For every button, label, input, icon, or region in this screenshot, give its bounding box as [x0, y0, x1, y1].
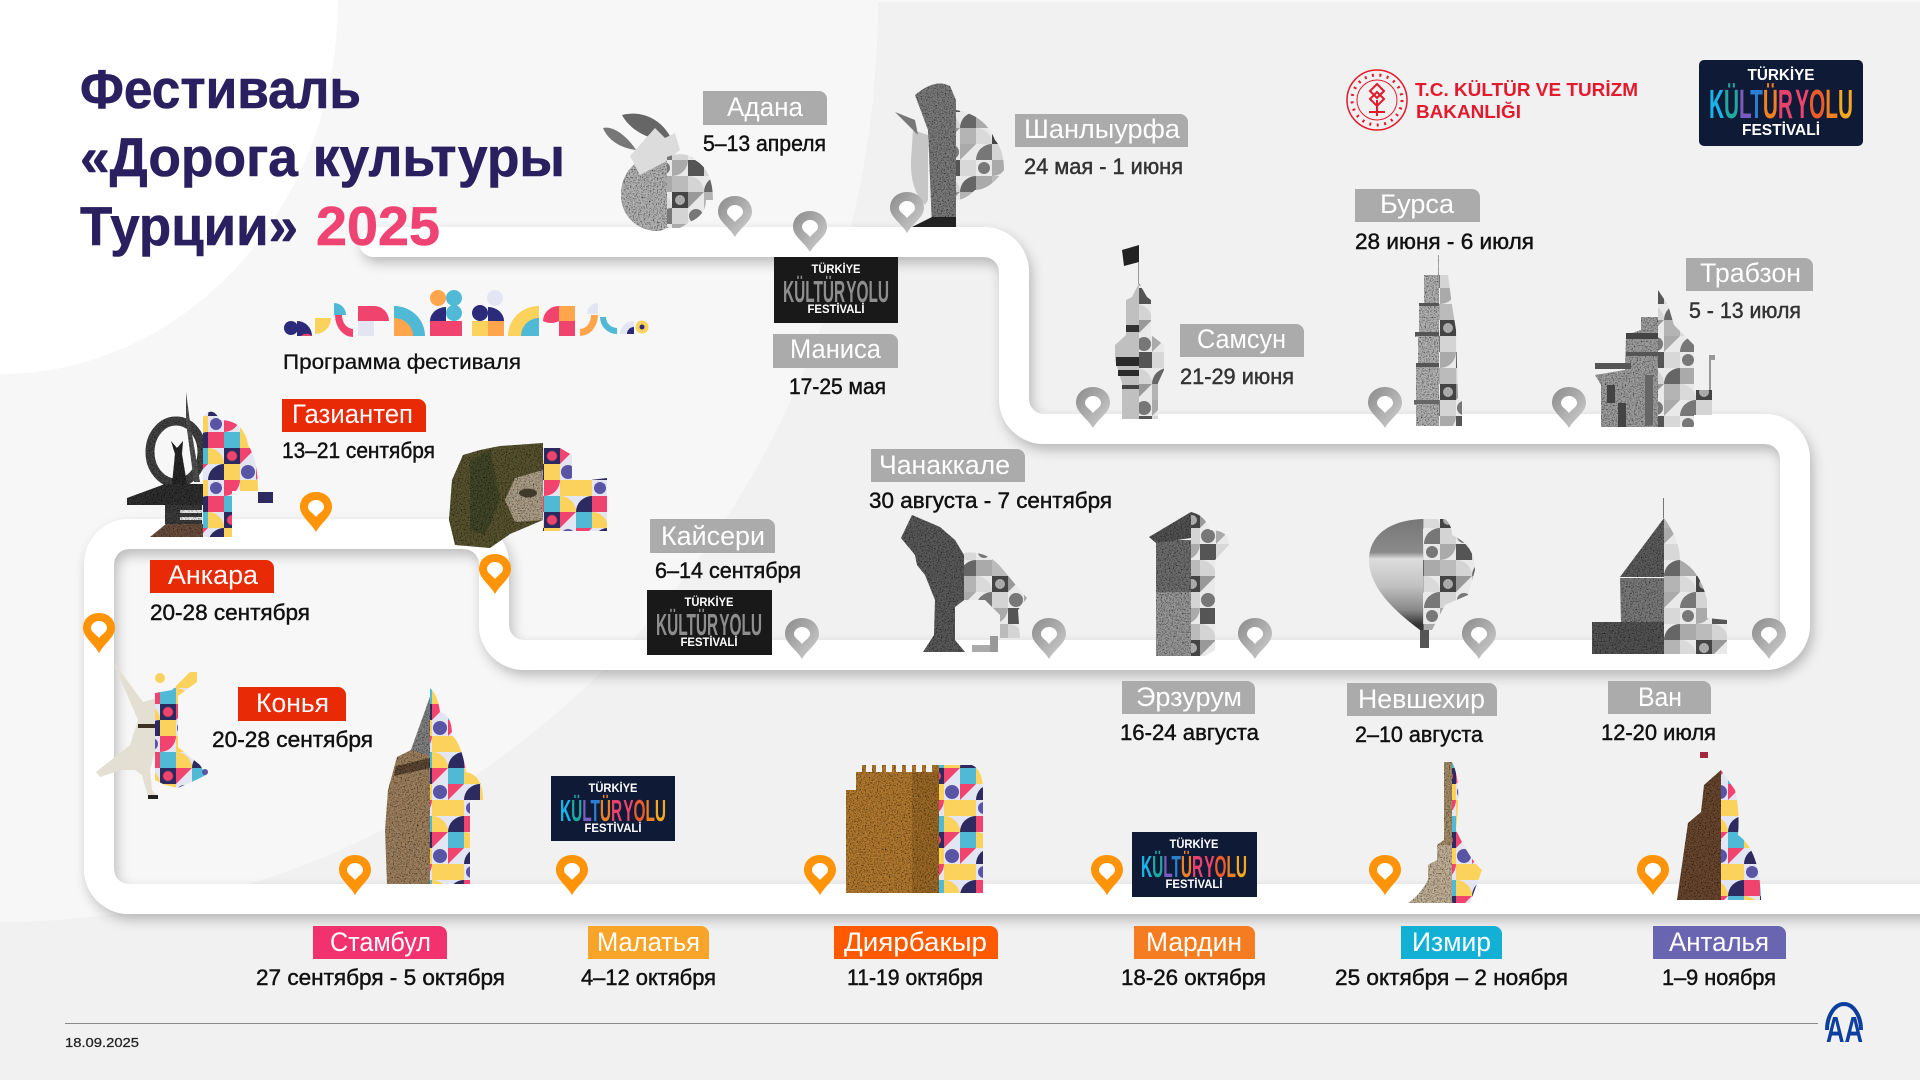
title: Фестиваль [80, 58, 361, 120]
stop: Nevsehir: 2–10 августа [1355, 722, 1484, 747]
stop: Van: 12-20 июля [1601, 720, 1716, 745]
stop: Trabzon: Трабзон [1700, 258, 1801, 288]
decorative programme strip [284, 290, 648, 337]
logo: colour Malatya: FESTİVALİ [584, 822, 642, 835]
stop: Antalya: Анталья [1669, 927, 1769, 957]
illustration: Trabzon mansion [1595, 273, 1715, 427]
stop: Nevsehir: Невшехир [1358, 684, 1485, 714]
logo: grey Manisa: FESTİVALİ [808, 303, 864, 316]
date: 18.09.2025 [65, 1035, 139, 1050]
pins: past grey [718, 192, 1786, 659]
stop: Sanliurfa: 24 мая - 1 июня [1024, 154, 1183, 179]
logo: Anadolu Agency: AA [1826, 1009, 1863, 1050]
illustration: Erzurum twin minaret [1149, 512, 1229, 656]
illustration: Konya whirling dervish [96, 662, 208, 799]
stop: Canakkale: 30 августа - 7 сентября [869, 488, 1112, 513]
stop: Ankara: Анкара [168, 560, 259, 590]
logo: grey Kayseri: KÜLTÜR YOLU [656, 607, 762, 642]
winding festival road [99, 242, 1920, 899]
stop: Gaziantep [282, 399, 435, 463]
logo: colour Malatya: KÜLTÜR YOLU [560, 793, 666, 828]
logo: colour Mardin [1132, 832, 1257, 897]
stop: Erzurum [1120, 681, 1260, 745]
stop: Diyarbakir [834, 926, 998, 990]
logo: Anadolu Agency [1826, 1004, 1863, 1050]
stop: Istanbul [256, 926, 505, 990]
stop: Mardin [1121, 926, 1266, 990]
stop: Adana: 5–13 апреля [703, 131, 826, 156]
stop: Manisa: 17-25 мая [789, 374, 886, 399]
illustration: Bursa clock tower [1414, 255, 1462, 426]
illustration: Antalya tower [1677, 752, 1761, 900]
stop: Van [1601, 681, 1716, 745]
illustration: Diyarbakir fortress [846, 765, 983, 893]
stop: Nevsehir [1347, 683, 1497, 747]
illustration: Gaziantep mosaic face [449, 443, 607, 548]
footer rule [65, 1023, 1818, 1024]
stop: Bursa: 28 июня - 6 июля [1355, 229, 1534, 254]
title: «Дорога культуры [80, 126, 565, 188]
stop: Canakkale: Чанаккале [879, 450, 1010, 480]
stop: Izmir: 25 октября – 2 ноября [1335, 965, 1568, 990]
logo: Türkiye Kültür Yolu main [1699, 60, 1863, 146]
illustration: Istanbul Galata tower [385, 688, 483, 884]
logo: colour Malatya [551, 776, 675, 841]
stop: Izmir: Измир [1412, 927, 1491, 957]
stop: Gaziantep: 13–21 сентября [282, 438, 435, 463]
stop: Sanliurfa [1015, 114, 1188, 179]
logo: colour Mardin: TÜRKİYE [1170, 838, 1219, 851]
stop: Manisa: Маниса [790, 334, 882, 364]
logo: grey Kayseri: TÜRKİYE [684, 596, 734, 609]
logo: Ministry of Culture and Tourism: BAKANLIĞI [1416, 101, 1521, 122]
logo: Ministry of Culture and Tourism [1347, 70, 1638, 130]
stop: Trabzon [1686, 258, 1813, 323]
illustration: Van Akdamar church [1592, 498, 1727, 654]
stop: Malatya: 4–12 октября [581, 965, 716, 990]
illustration: Nevsehir balloon [1369, 519, 1475, 648]
stop: Malatya [581, 926, 716, 990]
illustration: Sanliurfa fish lake monument [895, 83, 1004, 227]
illustration: Gaziantep monument [127, 392, 273, 537]
pins: upcoming orange [83, 492, 1669, 895]
logo: colour Mardin: FESTİVALİ [1166, 878, 1222, 891]
stop: Antalya: 1–9 ноября [1662, 965, 1776, 990]
stop: Bursa: Бурса [1380, 189, 1455, 219]
stop: Mardin: 18-26 октября [1121, 965, 1266, 990]
stop: Ankara: 20-28 сентября [150, 600, 310, 625]
stop: Bursa [1355, 189, 1534, 254]
logo: grey Manisa: KÜLTÜR YOLU [783, 274, 889, 309]
stop: Van: Ван [1638, 682, 1682, 712]
stop: Samsun [1180, 324, 1304, 389]
stop: Mardin: Мардин [1146, 927, 1242, 957]
stop: Adana [703, 91, 827, 156]
stop: Konya: 20-28 сентября [212, 727, 373, 752]
stop: Adana: Адана [727, 92, 804, 122]
stop: Konya [212, 687, 373, 752]
stop: Erzurum: 16-24 августа [1120, 720, 1260, 745]
stop: Konya: Конья [256, 688, 329, 718]
stop: Erzurum: Эрзурум [1136, 682, 1242, 712]
stop: Trabzon: 5 - 13 июля [1689, 298, 1801, 323]
title [80, 58, 565, 257]
logo: Türkiye Kültür Yolu main: KÜLTÜR YOLU [1709, 81, 1853, 127]
stop: Sanliurfa: Шанлыурфа [1024, 114, 1181, 144]
stop: Izmir [1335, 926, 1568, 990]
stop: Malatya: Малатья [597, 927, 700, 957]
logo: grey Kayseri: FESTİVALİ [680, 636, 738, 649]
stop: Kayseri [650, 519, 801, 583]
illustration: Samsun clock tower [1115, 245, 1164, 419]
stop: Manisa [773, 334, 898, 399]
stop: Istanbul: 27 сентября - 5 октября [256, 965, 505, 990]
stop: Ankara [150, 560, 310, 625]
logo: Ministry of Culture and Tourism: T.C. KÜLTÜR VE TURİZM [1415, 80, 1638, 100]
title: Турции» [80, 195, 298, 257]
stop: Diyarbakir: 11-19 октября [847, 965, 983, 990]
stop: Kayseri: Кайсери [661, 521, 765, 551]
stop: Canakkale [869, 449, 1112, 513]
logo: colour Malatya: TÜRKİYE [588, 782, 638, 795]
logo: Türkiye Kültür Yolu main: FESTİVALİ [1742, 122, 1820, 139]
stop: Samsun: 21-29 июня [1180, 364, 1294, 389]
stop: Kayseri: 6–14 сентября [655, 558, 801, 583]
logo: Türkiye Kültür Yolu main: TÜRKİYE [1748, 67, 1814, 84]
stop: Antalya [1653, 926, 1786, 990]
logo: colour Mardin: KÜLTÜR YOLU [1141, 849, 1247, 884]
logo: grey Manisa: TÜRKİYE [812, 263, 861, 276]
stop: Gaziantep: Газиантеп [292, 399, 413, 429]
title: 2025 [316, 195, 440, 257]
logo: grey Kayseri [647, 590, 772, 655]
stop: Samsun: Самсун [1197, 324, 1286, 354]
stop: Diyarbakir: Диярбакыр [844, 927, 987, 957]
logo: grey Manisa [774, 257, 898, 323]
illustration: Canakkale Trojan horse [901, 515, 1027, 652]
illustration: Izmir clock tower [1408, 762, 1482, 903]
illustration: Adana orange [603, 114, 713, 231]
stop: Istanbul: Стамбул [330, 927, 431, 957]
programme label: Программа фестиваля [283, 351, 521, 374]
